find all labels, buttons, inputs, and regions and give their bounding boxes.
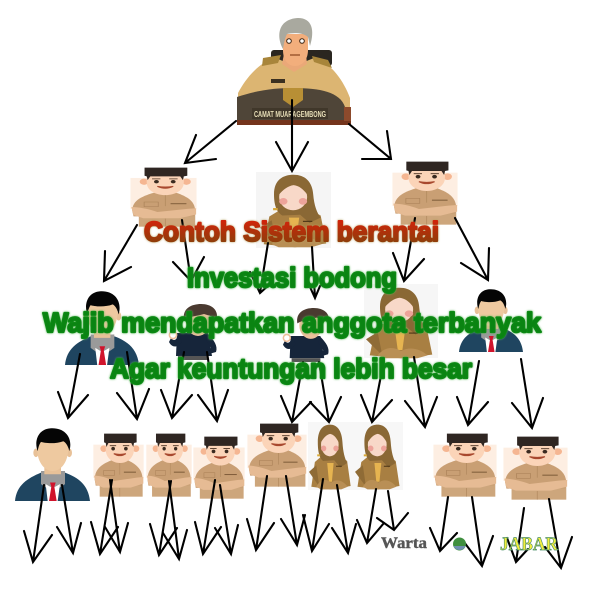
arrow: row 2 e [393, 218, 424, 281]
arrow: row 2 b [173, 220, 204, 281]
arrow: row 3 e [281, 362, 311, 422]
row 3 figure: woman box [364, 284, 438, 358]
row 4 figure: officer 4 [247, 424, 307, 487]
arrow: row 4 a [24, 485, 52, 562]
name plate text: CAMAT MUARAGEMBONG [254, 110, 326, 119]
headline line 3: Wajib mendapatkan anggota terbanyak [43, 307, 541, 338]
row 4 figure: two women box [308, 422, 403, 490]
headline line 1: Contoh Sistem berantai [144, 216, 439, 247]
arrow: row 4 m [357, 489, 384, 543]
arrow: row 3 f [310, 362, 341, 422]
arrow: row 3 b [117, 352, 149, 419]
arrow: row 4 g [195, 480, 221, 554]
headline text [43, 216, 541, 384]
hair [279, 18, 312, 49]
watermark logo [453, 538, 466, 550]
arrow: row 3 d [198, 352, 228, 421]
row 4 figure: suit man [15, 428, 90, 501]
arrow: row 4 o [430, 497, 457, 551]
arrow: row 4 l [332, 485, 356, 553]
pocket tag [271, 79, 285, 83]
arrow: row 4 r [545, 499, 572, 568]
arrow: row 3 c [161, 352, 192, 418]
arrow: row 4 c [91, 480, 118, 554]
emblem [283, 88, 303, 107]
row 2 figure: woman box [256, 172, 331, 248]
epaulettes [262, 55, 332, 68]
arrow: row 2 c [250, 243, 270, 293]
arrow: row 4 i [247, 476, 274, 550]
arrow: row 2 f [455, 218, 489, 280]
headline line 4: Agar keuntungan lebih besar [110, 353, 472, 384]
headline line 2: Investasi bodong [187, 262, 397, 293]
arrow: row 2 a [104, 225, 137, 281]
arrow: row 2 d [310, 247, 320, 298]
official at desk [237, 18, 351, 125]
desk [237, 88, 350, 122]
row 4 figure: officer 3 [193, 437, 245, 499]
arrow: official to left [185, 121, 236, 163]
arrow: row 4 k [303, 479, 329, 551]
neck [282, 54, 307, 72]
row 3 figure: slim man right [283, 308, 329, 362]
row 4 figure: officer 5 [433, 434, 497, 497]
arrow: row 3 i [457, 361, 488, 425]
arrow: row 3 j [512, 359, 543, 428]
desk side [344, 107, 351, 121]
row 4 figure: officer 2 [146, 434, 192, 497]
watermark word: JABAR: JABAR [500, 534, 558, 555]
arrow: row 3 g [361, 360, 392, 422]
arrow: row 3 a [58, 354, 88, 418]
name plate [252, 108, 328, 119]
arrow: row 4 j [281, 476, 305, 545]
eyes and mouth [287, 39, 304, 55]
row 4 figure: officer 1 [93, 434, 144, 497]
row 3 figure: suit man right [459, 289, 523, 352]
arrow: row 4 q [507, 508, 528, 562]
row 2 figure: officer right [392, 162, 458, 225]
row 3 figure: suit man left [65, 291, 139, 365]
arrow: row 4 f [163, 481, 187, 559]
arrow: official to right [349, 124, 391, 159]
arrow: row 4 e [150, 481, 177, 555]
row 4 figure: officer 6 [503, 437, 568, 500]
arrow: row 4 d [105, 480, 128, 552]
watermark [381, 534, 558, 555]
arrow: row 3 h [405, 357, 437, 427]
arrow: row 4 p [464, 497, 493, 566]
arrow: row 4 b [57, 485, 81, 553]
row 2 figure: officer left [130, 168, 197, 227]
chair back [271, 50, 332, 66]
row 3 figure: slim man left [169, 304, 217, 360]
uniform [238, 58, 350, 108]
arrow: row 4 n [377, 491, 408, 530]
desk bottom edge [237, 120, 351, 125]
arrow: row 4 h [215, 485, 238, 554]
arrow: official to centre [276, 100, 308, 171]
head [283, 34, 308, 66]
watermark word: Warta: Warta [381, 535, 427, 552]
